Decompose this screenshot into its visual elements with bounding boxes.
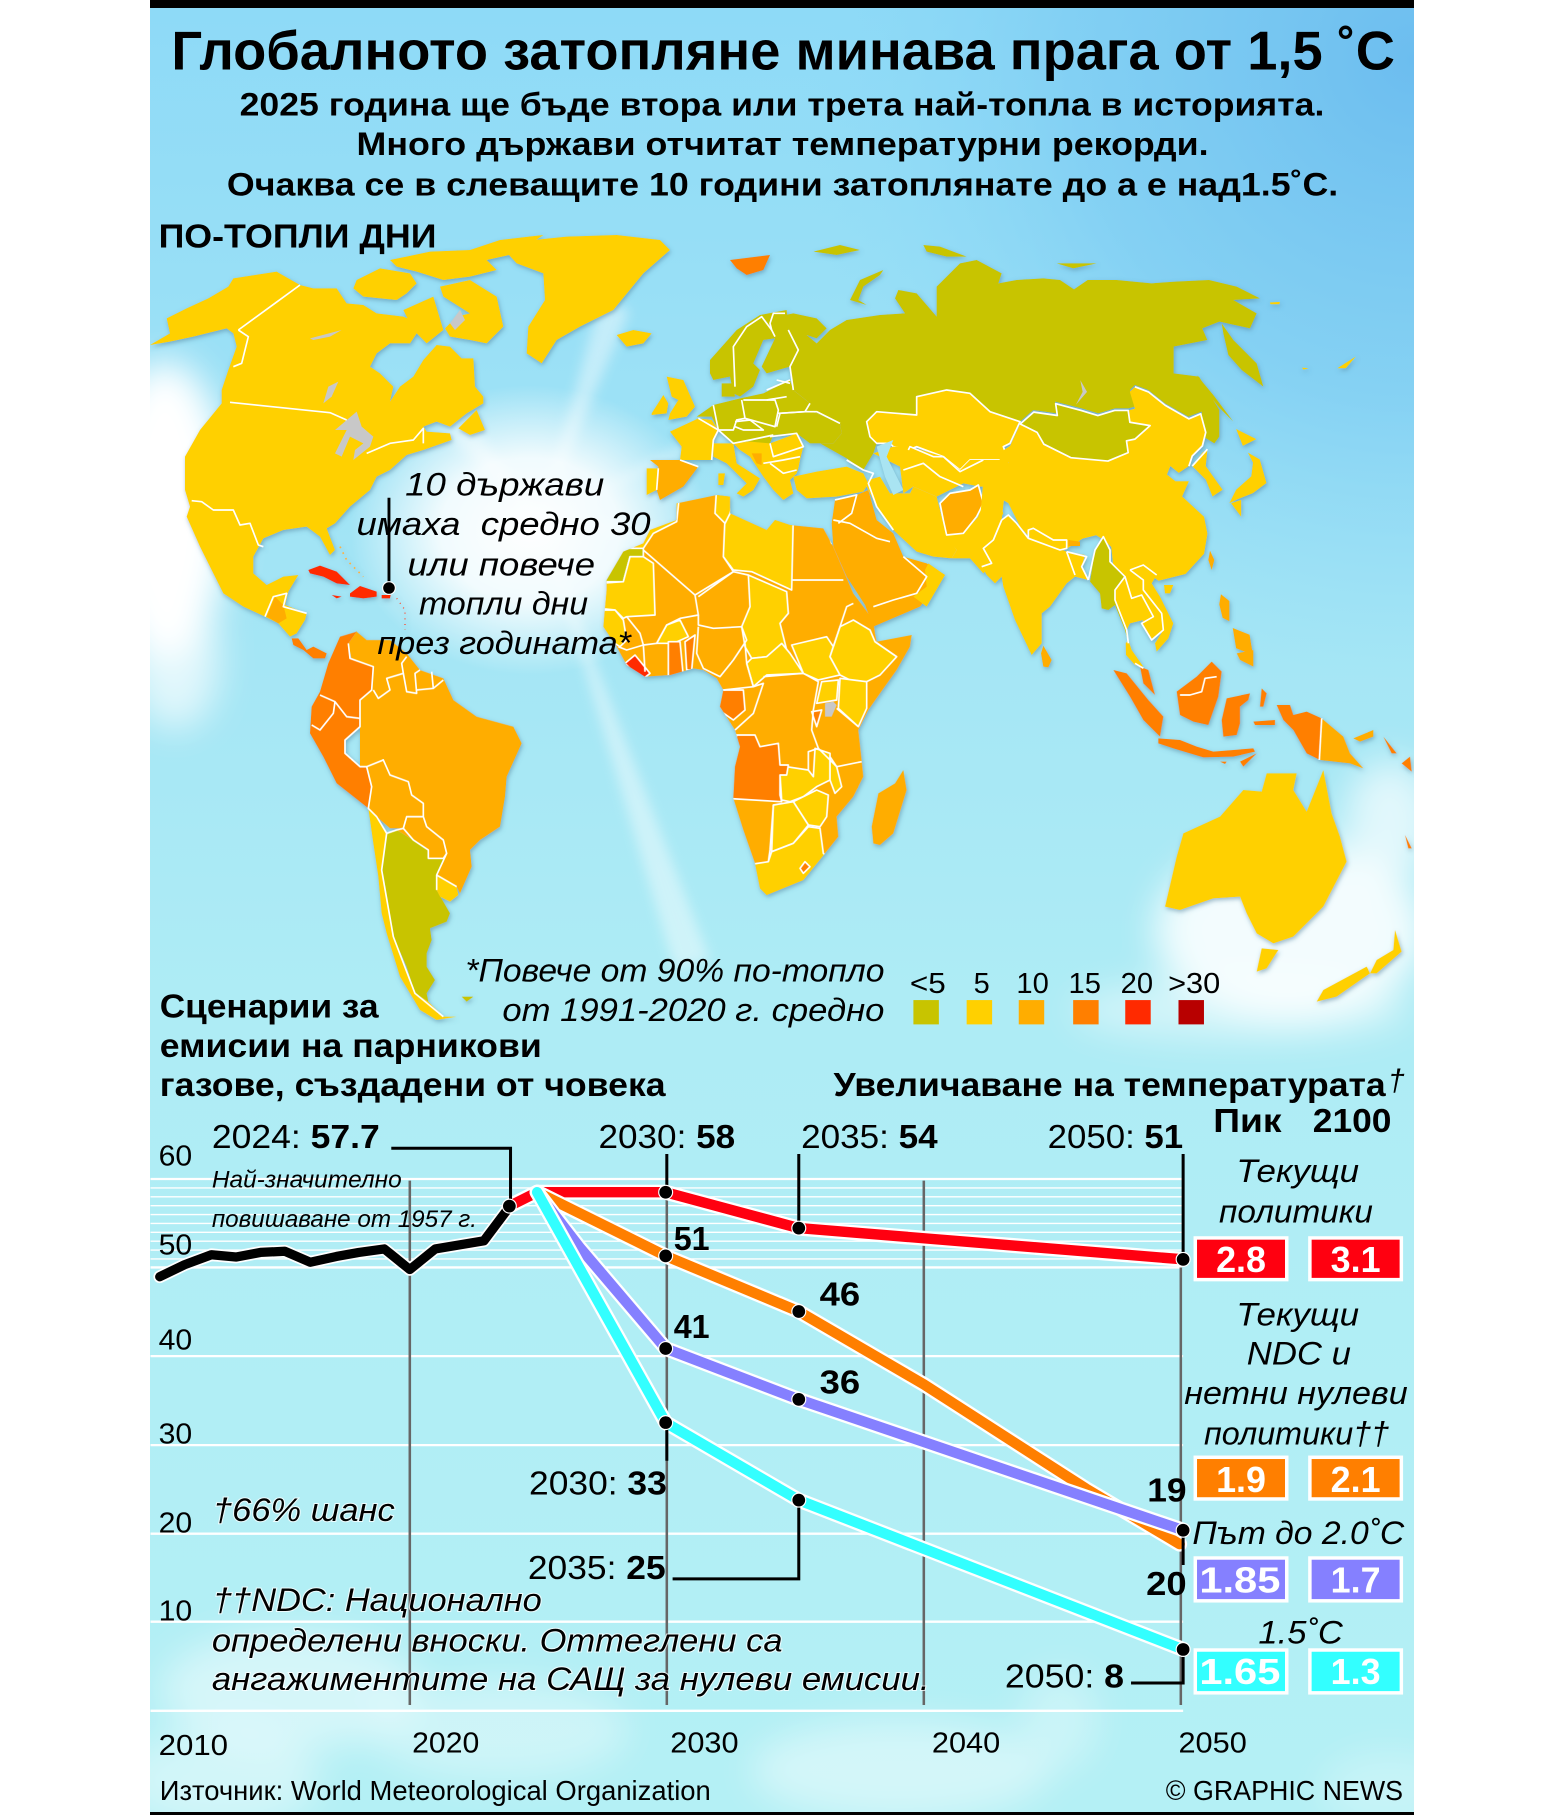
scenario labels: политики††	[1204, 1416, 1389, 1452]
map legend: <5	[910, 968, 946, 1000]
x axis labels: 2030	[670, 1727, 739, 1759]
y axis labels: 30	[159, 1418, 192, 1450]
y axis labels	[159, 1141, 192, 1627]
map heading: ПО-ТОПЛИ ДНИ	[159, 219, 436, 256]
chart heading: газове, създадени от човека	[160, 1067, 666, 1104]
value boxes: 2.0C: 1.85	[1199, 1561, 1280, 1601]
value boxes: NDC: 1.9	[1216, 1460, 1266, 1500]
scenario labels	[1184, 1153, 1408, 1651]
chart heading: Сценарии за	[160, 988, 379, 1025]
map legend: 20	[1121, 968, 1153, 1000]
map legend: 5	[974, 968, 990, 1000]
callout: 10 countries: 10 държави	[405, 466, 604, 502]
point labels: 46	[820, 1277, 860, 1314]
map legend: >30	[1168, 968, 1220, 1000]
y axis labels: 40	[159, 1325, 192, 1357]
y axis labels: 50	[159, 1230, 192, 1262]
series: 1.5C line	[537, 1192, 1183, 1649]
footnote texts: ангажиментите на САЩ за нулеви емисии.	[212, 1661, 930, 1697]
scenario labels: нетни нулеви	[1184, 1375, 1408, 1411]
credit: © GRAPHIC NEWS	[1166, 1775, 1403, 1806]
leaders	[391, 1148, 1183, 1683]
temperature heading: Увеличаване на температурата	[834, 1067, 1386, 1104]
callout: 10 countries: имаха средно 30	[357, 506, 651, 542]
scenario labels: NDC и	[1247, 1336, 1351, 1372]
subtitle	[227, 87, 1338, 203]
map legend	[910, 968, 1220, 1024]
world map	[150, 235, 1412, 1020]
series: historical and current policies line	[160, 1192, 1183, 1277]
value boxes: 1.5C: 1.3	[1331, 1652, 1381, 1692]
scenario labels: Път до 2.0˚C	[1192, 1515, 1405, 1551]
x axis labels: 2040	[932, 1727, 1000, 1759]
callout: 10 countries: през годината*	[377, 625, 632, 661]
chart: emissions scenarios	[150, 1119, 1247, 1762]
point labels: 19	[1147, 1472, 1187, 1509]
gridlines	[150, 1179, 1183, 1711]
x axis labels: 2010	[159, 1730, 228, 1762]
value boxes: NDC	[1195, 1457, 1401, 1500]
point labels: 2035: 54	[801, 1119, 938, 1156]
region: Africa	[593, 487, 912, 900]
temperature heading	[834, 1064, 1405, 1140]
footnote texts: определени вноски. Оттеглени са	[212, 1623, 783, 1659]
x axis labels: 2020	[412, 1727, 479, 1759]
subtitle: Много държави отчитат температурни рекорди.	[357, 126, 1209, 162]
footnote texts: ††NDC: Национално	[213, 1582, 542, 1618]
year verticals	[410, 1181, 1181, 1705]
point labels	[212, 1119, 1187, 1696]
value boxes: 2.0C: 1.7	[1331, 1561, 1381, 1601]
all text and chart, view scale	[150, 20, 1408, 1806]
callout: 10 countries	[357, 466, 651, 661]
point labels: 41	[674, 1309, 710, 1346]
value boxes: current policies: 2.8	[1216, 1240, 1266, 1280]
map legend: 15	[1069, 968, 1101, 1000]
temperature scenario panel	[1184, 1153, 1408, 1693]
map legend: 10	[1016, 968, 1049, 1000]
callout: 10 countries: или повече	[407, 546, 595, 582]
callout: 10 countries: топли дни	[419, 586, 588, 622]
footnote texts	[212, 1492, 930, 1697]
scenario labels: 1.5˚C	[1258, 1615, 1344, 1651]
footnote: warmer days definition: *Повече от 90% по-топло	[465, 953, 884, 989]
point labels: 2035: 25	[528, 1550, 666, 1587]
data dots	[502, 1185, 1190, 1656]
point labels: 2024: 57.7	[212, 1119, 380, 1156]
value boxes: 2.0C	[1195, 1558, 1401, 1601]
source: Източник: World Meteorological Organization	[160, 1775, 711, 1806]
top black bar	[150, 0, 1414, 8]
scenario labels: политики	[1219, 1193, 1373, 1229]
value boxes: 1.5C	[1195, 1650, 1401, 1693]
point labels: 2030: 33	[529, 1465, 667, 1502]
note: largest rise since 1957: повишаване от 1957 г.	[212, 1207, 477, 1233]
value boxes: 1.5C: 1.65	[1199, 1652, 1280, 1692]
point labels: 2030: 58	[599, 1119, 735, 1156]
bottom black rule	[150, 1812, 1414, 1815]
y axis labels: 20	[159, 1508, 192, 1540]
x axis labels	[159, 1727, 1247, 1762]
value boxes: NDC: 2.1	[1331, 1460, 1381, 1500]
region: North America	[150, 235, 670, 658]
note: largest rise since 1957	[212, 1168, 477, 1233]
value boxes: current policies: 3.1	[1331, 1240, 1381, 1280]
region: South America	[310, 632, 522, 1020]
scenario labels: Текущи	[1236, 1296, 1359, 1332]
chart heading: емисии на парникови	[160, 1028, 542, 1065]
temperature heading: Пик	[1213, 1103, 1282, 1140]
title: Глобалното затопляне минава прага от 1,5 ˚C	[171, 20, 1395, 81]
scenario labels: Текущи	[1236, 1153, 1359, 1189]
point labels: 36	[820, 1365, 860, 1402]
point labels: 51	[674, 1221, 710, 1258]
y axis labels: 10	[159, 1596, 192, 1627]
series: path to 2.0C line	[537, 1192, 1183, 1530]
note: largest rise since 1957: Най-значително	[212, 1168, 402, 1194]
footnote: warmer days definition	[465, 953, 884, 1028]
y axis labels: 60	[159, 1141, 192, 1173]
temperature heading: †	[1388, 1064, 1405, 1097]
series: current NDC and net-zero line	[537, 1192, 1180, 1544]
region: Indonesia and Oceania	[1113, 650, 1412, 1002]
region: South and Southeast Asia	[973, 447, 1214, 667]
subtitle: 2025 година ще бъде втора или трета най-топла в историята.	[240, 87, 1324, 123]
footnote: warmer days definition: от 1991-2020 г. средно	[502, 992, 884, 1028]
x axis labels: 2050	[1178, 1727, 1247, 1759]
region: East Asia	[987, 302, 1356, 655]
point labels: 2050: 51	[1048, 1119, 1183, 1156]
temperature heading: 2100	[1313, 1103, 1392, 1140]
point labels: 2050: 8	[1005, 1659, 1124, 1696]
point labels: 20	[1146, 1566, 1187, 1603]
region: Europe and West Asia	[647, 245, 1263, 627]
footnote texts: †66% шанс	[213, 1492, 395, 1528]
value boxes: current policies	[1195, 1238, 1401, 1280]
callout leader	[383, 498, 395, 594]
subtitle: Очаква се в слеващите 10 години затоплянате до а е над1.5˚C.	[227, 167, 1338, 203]
chart heading	[160, 988, 666, 1104]
